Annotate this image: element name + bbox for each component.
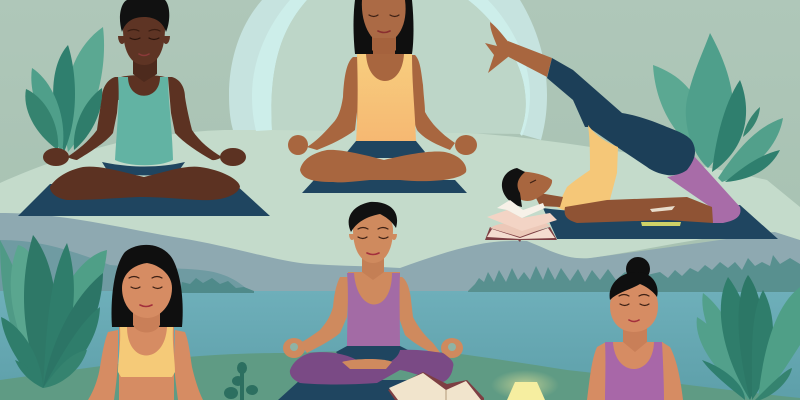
book: foreground bbox=[388, 372, 484, 400]
hair bbox=[349, 202, 397, 232]
plant: lower right bbox=[697, 275, 800, 400]
neck bbox=[372, 30, 396, 62]
head bbox=[353, 212, 393, 263]
feet bbox=[485, 22, 510, 73]
purple leggings bbox=[667, 155, 740, 223]
neck bbox=[623, 322, 647, 352]
hair bbox=[112, 245, 183, 327]
figure: meditating woman, yellow tank bbox=[288, 0, 477, 193]
head bbox=[610, 282, 658, 332]
yellow top bbox=[557, 125, 618, 210]
lower leg bbox=[505, 41, 552, 77]
figure: meditating woman, purple tank bbox=[278, 202, 463, 400]
ears bbox=[349, 234, 397, 240]
arch interior bbox=[271, 0, 526, 134]
forest left bbox=[180, 278, 254, 293]
plant: small foreground bbox=[224, 362, 258, 400]
legs bbox=[290, 350, 453, 384]
shorts bbox=[336, 346, 412, 362]
arms bbox=[307, 57, 360, 150]
tank bbox=[356, 54, 416, 142]
neck bbox=[133, 55, 157, 82]
neck front bbox=[373, 38, 395, 54]
neck bbox=[533, 192, 563, 207]
feet bbox=[342, 359, 392, 369]
grass foreground bbox=[0, 351, 800, 400]
face details bbox=[129, 276, 162, 306]
legs bbox=[50, 167, 240, 200]
mat bbox=[278, 380, 460, 400]
hair back bbox=[354, 0, 414, 54]
tank bbox=[605, 342, 664, 400]
hand right bbox=[220, 148, 246, 166]
hand left bbox=[43, 148, 69, 166]
face details bbox=[358, 228, 388, 254]
head bbox=[510, 171, 552, 201]
ears bbox=[118, 36, 170, 44]
plant: lower left bbox=[0, 235, 107, 388]
plant: top right bbox=[653, 33, 783, 182]
mountains bbox=[0, 213, 800, 300]
hand right bbox=[441, 338, 463, 358]
arms bbox=[300, 277, 350, 353]
chest skin bbox=[118, 75, 168, 100]
hand mudra right bbox=[448, 343, 456, 351]
lamp bbox=[491, 370, 559, 400]
shorts bbox=[102, 162, 185, 175]
arm highlight bbox=[650, 206, 675, 212]
figure: shoulder stand with raised legs bbox=[485, 22, 778, 239]
arms bbox=[88, 330, 118, 400]
head bbox=[362, 0, 406, 42]
torso bbox=[119, 327, 174, 400]
arms bbox=[67, 77, 120, 160]
eye bbox=[530, 180, 536, 183]
hand right bbox=[455, 135, 477, 155]
mat bbox=[543, 205, 778, 239]
face details bbox=[619, 294, 649, 322]
navy leggings bbox=[547, 58, 695, 175]
arms bbox=[587, 342, 612, 400]
torso skin bbox=[357, 54, 412, 142]
book: under head bbox=[485, 200, 557, 242]
face details bbox=[369, 15, 399, 32]
arm bbox=[565, 197, 713, 223]
hair cap bbox=[610, 272, 658, 300]
lake bbox=[0, 291, 800, 400]
light arch bbox=[229, 0, 547, 140]
face details bbox=[128, 30, 160, 56]
plant: top left bbox=[25, 27, 104, 152]
hand left bbox=[283, 338, 305, 358]
tank bbox=[118, 327, 175, 377]
torso tank bbox=[115, 77, 173, 165]
mat bbox=[18, 184, 270, 216]
hair bbox=[502, 168, 525, 207]
yellow block bbox=[641, 222, 681, 226]
chest skin bbox=[605, 342, 663, 372]
neck bbox=[362, 250, 384, 280]
figure: meditating woman, purple top, lower right bbox=[587, 257, 683, 400]
hair bun bbox=[626, 257, 650, 281]
figure: meditating woman, dark skin, teal tank bbox=[18, 0, 270, 216]
light hill bbox=[0, 128, 800, 268]
forest right bbox=[468, 255, 800, 292]
neck bbox=[133, 305, 160, 332]
far hill left bbox=[0, 240, 250, 292]
mat bbox=[302, 180, 467, 193]
torso skin bbox=[348, 272, 400, 310]
figure: meditating woman, yellow top, lower left bbox=[88, 245, 203, 400]
head bbox=[123, 15, 165, 65]
hair bbox=[120, 0, 169, 32]
head bbox=[122, 263, 172, 318]
shorts bbox=[347, 141, 425, 158]
hand mudra left bbox=[290, 343, 298, 351]
hand left bbox=[288, 135, 308, 155]
legs bbox=[300, 150, 466, 182]
torso tank bbox=[347, 273, 400, 348]
